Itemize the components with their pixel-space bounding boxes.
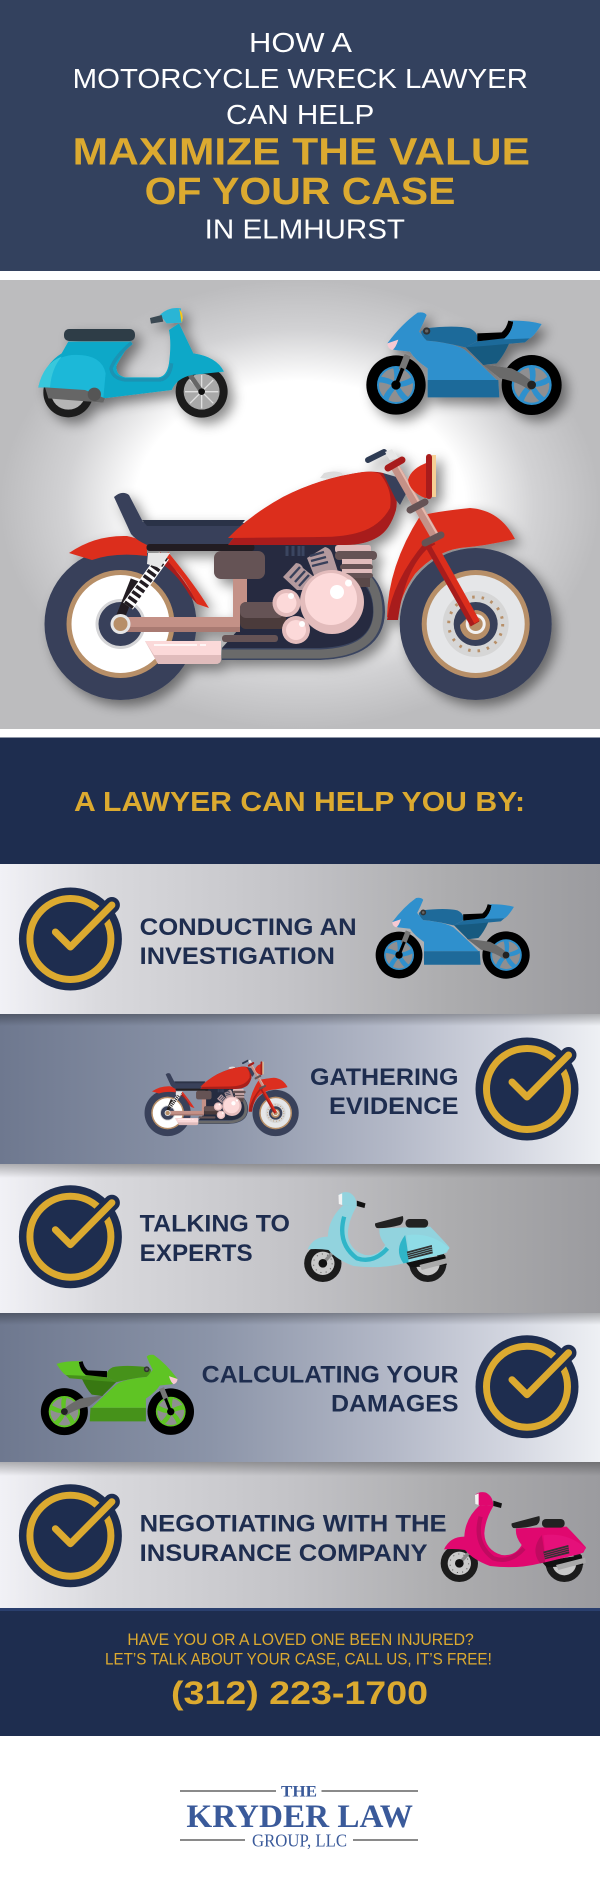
icon: green sport bike [41, 1355, 194, 1435]
heading: A LAWYER CAN HELP YOU BY: [74, 786, 525, 817]
title: intro lines: MOTORCYCLE WRECK LAWYER [73, 63, 528, 94]
panel: row calculating your damages [0, 1313, 600, 1462]
text: DAMAGES [331, 1391, 458, 1418]
text [140, 1211, 290, 1267]
icon: red cruiser motorcycle [44, 449, 552, 700]
icon: blue sport bike [366, 312, 562, 415]
logo: The Kryder Law Group: THE [281, 1784, 317, 1801]
text: TALKING TO [140, 1211, 290, 1238]
text: call to action lines: HAVE YOU OR A LOVED ONE BEEN INJURED? [127, 1631, 474, 1649]
panel: row talking to experts [0, 1164, 600, 1313]
title: intro lines [73, 27, 528, 130]
text: EVIDENCE [329, 1093, 458, 1120]
text [140, 914, 357, 970]
panel: row negotiating with the insurance company [0, 1462, 600, 1609]
text: call to action lines: LET’S TALK ABOUT YOUR CASE, CALL US, IT’S FREE! [105, 1650, 492, 1668]
title: highlighted lines [73, 132, 530, 213]
title: location line: IN ELMHURST [205, 214, 405, 245]
text: CONDUCTING AN [140, 914, 357, 941]
icon: cyan scooter [38, 308, 228, 418]
panel: row conducting an investigation [0, 864, 600, 1014]
logo: The Kryder Law Group: KRYDER LAW [186, 1799, 413, 1835]
icon: pink scooter [441, 1492, 586, 1582]
logo: The Kryder Law Group: GROUP, LLC [252, 1831, 347, 1851]
text: CALCULATING YOUR [202, 1362, 458, 1389]
panel: lawyer heading band [0, 738, 600, 864]
icon: check mark [19, 1484, 122, 1587]
title: highlighted lines: MAXIMIZE THE VALUE [73, 132, 530, 174]
title: intro lines: HOW A [249, 27, 352, 58]
icon: blue sport bike [376, 898, 530, 979]
text: call to action lines [105, 1631, 492, 1668]
text [310, 1064, 458, 1120]
text: GATHERING [310, 1064, 458, 1091]
icon: red cruiser [145, 1060, 299, 1136]
panel: call to action [0, 1608, 600, 1736]
panel: header [0, 0, 600, 271]
title: intro lines: CAN HELP [226, 99, 374, 130]
text: INVESTIGATION [140, 943, 335, 970]
logo: The Kryder Law Group [180, 1784, 418, 1851]
icon: check mark [476, 1038, 578, 1140]
text: EXPERTS [140, 1240, 253, 1267]
icon: check mark [19, 1185, 122, 1288]
text: NEGOTIATING WITH THE [140, 1511, 447, 1538]
title: highlighted lines: OF YOUR CASE [145, 171, 455, 213]
text [202, 1362, 458, 1418]
icon: check mark [19, 888, 122, 990]
text [140, 1511, 447, 1567]
panel: motorcycles image [0, 280, 600, 729]
phone number: (312) 223-1700 [171, 1675, 428, 1711]
icon: check mark [476, 1335, 578, 1438]
icon: light blue scooter [304, 1192, 449, 1282]
text: INSURANCE COMPANY [140, 1540, 427, 1567]
panel: row gathering evidence [0, 1014, 600, 1164]
